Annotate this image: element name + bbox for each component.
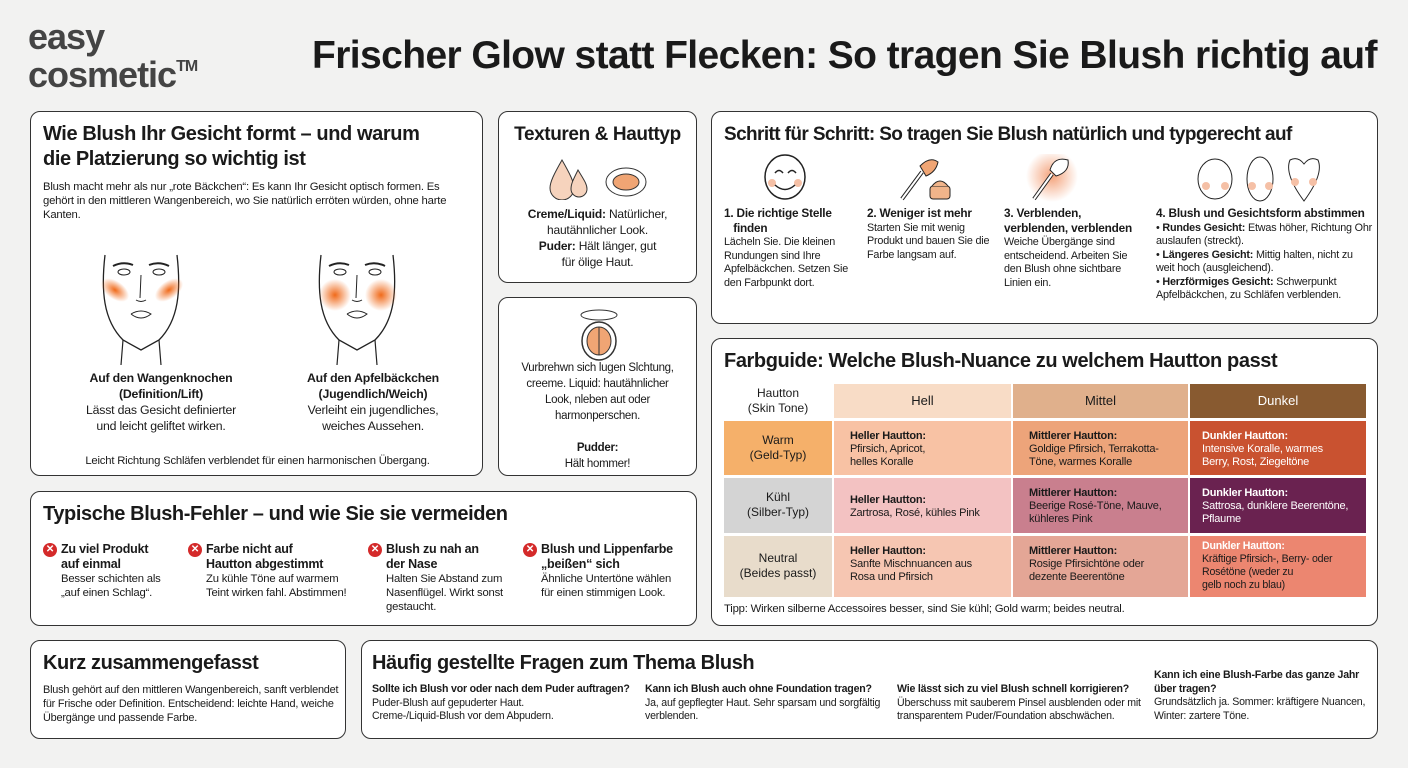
caption cheekbones: und leicht geliftet wirken. (96, 419, 226, 433)
table: Mittlerer Hautton: (1029, 545, 1117, 557)
faq 1: Puder-Blush auf gepuderter Haut. (372, 696, 524, 708)
faq 3: Überschuss mit sauberem Pinsel ausblenden oder mit transparentem Puder/Foundation abschwächen. (897, 696, 1141, 722)
logo (28, 16, 198, 95)
title: Frischer Glow statt Flecken: So tragen Sie Blush richtig auf (312, 34, 1377, 77)
mistake 2: Farbe nicht auf (206, 542, 293, 556)
text: Puder: Hält länger, gut (539, 239, 656, 253)
faq 2 (645, 683, 880, 722)
table: Mittlerer Hautton: (1029, 487, 1117, 499)
table: Pflaume (1202, 513, 1241, 525)
mistake 3: Blush zu nah an (386, 542, 479, 556)
mistake 1: auf einmal (61, 557, 121, 571)
panel: mistakes (30, 491, 697, 626)
step 1: Lächeln Sie. Die kleinen Rundungen sind Ihre Apfelbäckchen. Setzen Sie den Farbpunkt dort. (724, 236, 848, 288)
faq 2: Kann ich Blush auch ohne Foundation tragen? (645, 683, 872, 695)
heading: Wie Blush Ihr Gesicht formt – und warum (43, 123, 420, 145)
table: (Silber-Typ) (747, 505, 809, 519)
step 4 (1156, 206, 1372, 301)
heading: Typische Blush-Fehler – und wie Sie sie vermeiden (43, 503, 508, 525)
step 4: • Rundes Gesicht: Etwas höher, Richtung Ohr auslaufen (streckt). (1156, 222, 1372, 247)
faq 1: Sollte ich Blush vor oder nach dem Puder auftragen? (372, 683, 630, 695)
table: Rosa und Pfirsich (850, 571, 933, 583)
caption cheekbones: Auf den Wangenknochen (90, 371, 232, 385)
step 3: Weiche Übergänge sind entscheidend. Arbeiten Sie den Blush ohne sichtbare Linien ein. (1004, 236, 1127, 288)
faq 1: Creme-/Liquid-Blush vor dem Abpudern. (372, 710, 554, 722)
text (528, 207, 667, 269)
icon: compact (580, 310, 618, 361)
table: Dunkler Hautton: (1202, 540, 1285, 552)
table: Töne, warmes Koralle (1029, 456, 1132, 468)
panel: summary (30, 640, 346, 739)
panel: steps (711, 111, 1378, 324)
table: Zartrosa, Rosé, kühles Pink (850, 507, 980, 519)
text: Look, nleben aut oder (545, 394, 650, 406)
table: Heller Hautton: (850, 430, 926, 442)
panel: FAQ (361, 640, 1378, 739)
step 1 (724, 206, 848, 288)
table: dezente Beerentöne (1029, 571, 1124, 583)
heading: Kurz zusammengefasst (43, 652, 258, 674)
table: Mittlerer Hautton: (1029, 430, 1117, 442)
step 1: 1. Die richtige Stelle (724, 206, 832, 220)
logo: cosmeticTM (28, 54, 197, 95)
table: gelb noch zu blau) (1202, 579, 1285, 591)
table: Rosétöne (weder zu (1202, 566, 1293, 578)
text: creeme. Liquid: hautähnlicher (526, 378, 669, 390)
table: Dunkler Hautton: (1202, 487, 1288, 499)
panel: face placement (30, 111, 483, 476)
caption cheekbones (86, 371, 236, 433)
table: helles Koralle (850, 456, 913, 468)
table: Berry, Rost, Ziegeltöne (1202, 456, 1309, 468)
text: für ölige Haut. (562, 255, 633, 269)
table: Warm (762, 433, 794, 447)
mistake 1: „auf einen Schlag“. (61, 587, 152, 599)
heading: Farbguide: Welche Blush-Nuance zu welchem Hautton passt (724, 350, 1277, 372)
table: Kühl (766, 490, 790, 504)
heading: Texturen & Hauttyp (514, 124, 681, 145)
step 3: 3. Verblenden, (1004, 206, 1081, 220)
text: harmonperschen. (555, 410, 640, 422)
faq 4: Kann ich eine Blush-Farbe das ganze Jahr über tragen? (1154, 669, 1359, 694)
mistake 3: gestaucht. (386, 601, 436, 613)
heading: die Platzierung so wichtig ist (43, 148, 305, 170)
mistake 3: der Nase (386, 557, 437, 571)
mistake 2: Zu kühle Töne auf warmem (206, 573, 339, 585)
text: hautähnlicher Look. (547, 223, 648, 237)
faq 4 (1154, 669, 1365, 722)
logo: easy (28, 16, 104, 57)
faq 4: Grundsätzlich ja. Sommer: kräftigere Nuancen, Winter: zartere Töne. (1154, 696, 1365, 722)
text: Pudder: (577, 442, 618, 454)
faq 2: Ja, auf gepflegter Haut. Sehr sparsam und sorgfältig verblenden. (645, 696, 880, 722)
mistake 2: Teint wirken fahl. Abstimmen! (206, 587, 346, 599)
caption apples: (Jugendlich/Weich) (319, 387, 427, 401)
table: Hell (911, 393, 934, 408)
table (724, 384, 1366, 597)
mistake 1: ✕ (46, 544, 54, 555)
text: Blush gehört auf den mittleren Wangenbereich, sanft verblendet für Frische oder Definition. Entscheidend: leichte Hand, weiche Übergänge und passende Farbe. (43, 684, 338, 724)
mistake 4: für einen stimmigen Look. (541, 587, 665, 599)
mistake 2 (188, 542, 346, 599)
mistake 4: ✕ (526, 544, 534, 555)
icons (764, 154, 1320, 202)
table: Intensive Koralle, warmes (1202, 443, 1323, 455)
text: Hält hommer! (565, 458, 630, 470)
panel: textures (498, 111, 697, 283)
step 3: verblenden, verblenden (1004, 220, 1132, 234)
mistake 2: Hautton abgestimmt (206, 557, 323, 571)
step 4: • Herzförmiges Gesicht: Schwerpunkt Apfelbäckchen, zu Schläfen verblenden. (1156, 276, 1341, 301)
text: Vurbrehwn sich lugen Slchtung, (521, 362, 674, 374)
mistake 3: ✕ (371, 544, 379, 555)
table: Hautton (757, 386, 799, 400)
caption apples: Auf den Apfelbäckchen (307, 371, 439, 385)
table: Sanfte Mischnuancen aus (850, 558, 972, 570)
table: Mittel (1085, 393, 1116, 408)
mistake 1: Zu viel Produkt (61, 542, 148, 556)
icon: face cheekbones (102, 254, 182, 365)
mistake 1 (43, 542, 161, 599)
table: Kräftige Pfirsich-, Berry- oder (1202, 553, 1332, 565)
table: Dunkel (1258, 393, 1298, 408)
caption apples (307, 371, 439, 433)
mistake 1: Besser schichten als (61, 573, 161, 585)
step 2: 2. Weniger ist mehr (867, 206, 972, 220)
table: Beerige Rosé-Töne, Mauve, (1029, 500, 1162, 512)
table: Neutral (759, 551, 797, 565)
caption cheekbones: (Definition/Lift) (119, 387, 203, 401)
icon: face apples (318, 254, 396, 365)
table: Sattrosa, dunklere Beerentöne, (1202, 500, 1348, 512)
mistake 3: Halten Sie Abstand zum (386, 573, 502, 585)
table: Pfirsich, Apricot, (850, 443, 925, 455)
text: Creme/Liquid: Natürlicher, (528, 207, 667, 221)
heading (43, 123, 420, 170)
table: Rosige Pfirsichtöne oder (1029, 558, 1144, 570)
mistake 3 (368, 542, 504, 613)
table: (Skin Tone) (748, 401, 808, 415)
faq 3: Wie lässt sich zu viel Blush schnell korrigieren? (897, 683, 1129, 695)
mistake 4: Ähnliche Untertöne wählen (541, 573, 671, 585)
table: Dunkler Hautton: (1202, 430, 1288, 442)
step 3 (1004, 206, 1132, 288)
caption cheekbones: Lässt das Gesicht definierter (86, 403, 236, 417)
intro text: Blush macht mehr als nur „rote Bäckchen“: Es kann Ihr Gesicht optisch formen. Es gehört in den mittleren Wangenbereich, wo Sie natürlich erröten würden, ohne harte Kanten. (43, 181, 446, 221)
text (521, 362, 674, 470)
step 2: Starten Sie mit wenig Produkt und bauen Sie die Farbe langsam auf. (867, 222, 989, 260)
mistake 2: ✕ (191, 544, 199, 555)
table: Heller Hautton: (850, 494, 926, 506)
heading: Häufig gestellte Fragen zum Thema Blush (372, 652, 754, 674)
mistake 3: Nasenflügel. Wirkt sonst (386, 587, 503, 599)
table: kühleres Pink (1029, 513, 1092, 525)
faq 3 (897, 683, 1141, 722)
mistake 4: Blush und Lippenfarbe (541, 542, 673, 556)
caption apples: weiches Aussehen. (322, 419, 424, 433)
footnote: Leicht Richtung Schläfen verblendet für einen harmonischen Übergang. (85, 455, 430, 467)
step 1: finden (733, 220, 767, 234)
faq 1 (372, 683, 630, 722)
panel: color guide (711, 338, 1378, 626)
caption apples: Verleiht ein jugendliches, (308, 403, 438, 417)
table: Goldige Pfirsich, Terrakotta- (1029, 443, 1159, 455)
tip: Tipp: Wirken silberne Accessoires besser, sind Sie kühl; Gold warm; beides neutral. (724, 603, 1125, 615)
heading: Schritt für Schritt: So tragen Sie Blush natürlich und typgerecht auf (724, 124, 1292, 145)
panel: compact (498, 297, 697, 476)
table: (Geld-Typ) (750, 448, 806, 462)
table: Heller Hautton: (850, 545, 926, 557)
mistake 4: „beißen“ sich (541, 557, 620, 571)
step 4: 4. Blush und Gesichtsform abstimmen (1156, 206, 1365, 220)
table: (Beides passt) (740, 566, 816, 580)
icon: drops and compact (550, 159, 646, 200)
mistake 4 (523, 542, 673, 599)
step 4: • Längeres Gesicht: Mittig halten, nicht zu weit hoch (ausgleichend). (1156, 248, 1353, 274)
